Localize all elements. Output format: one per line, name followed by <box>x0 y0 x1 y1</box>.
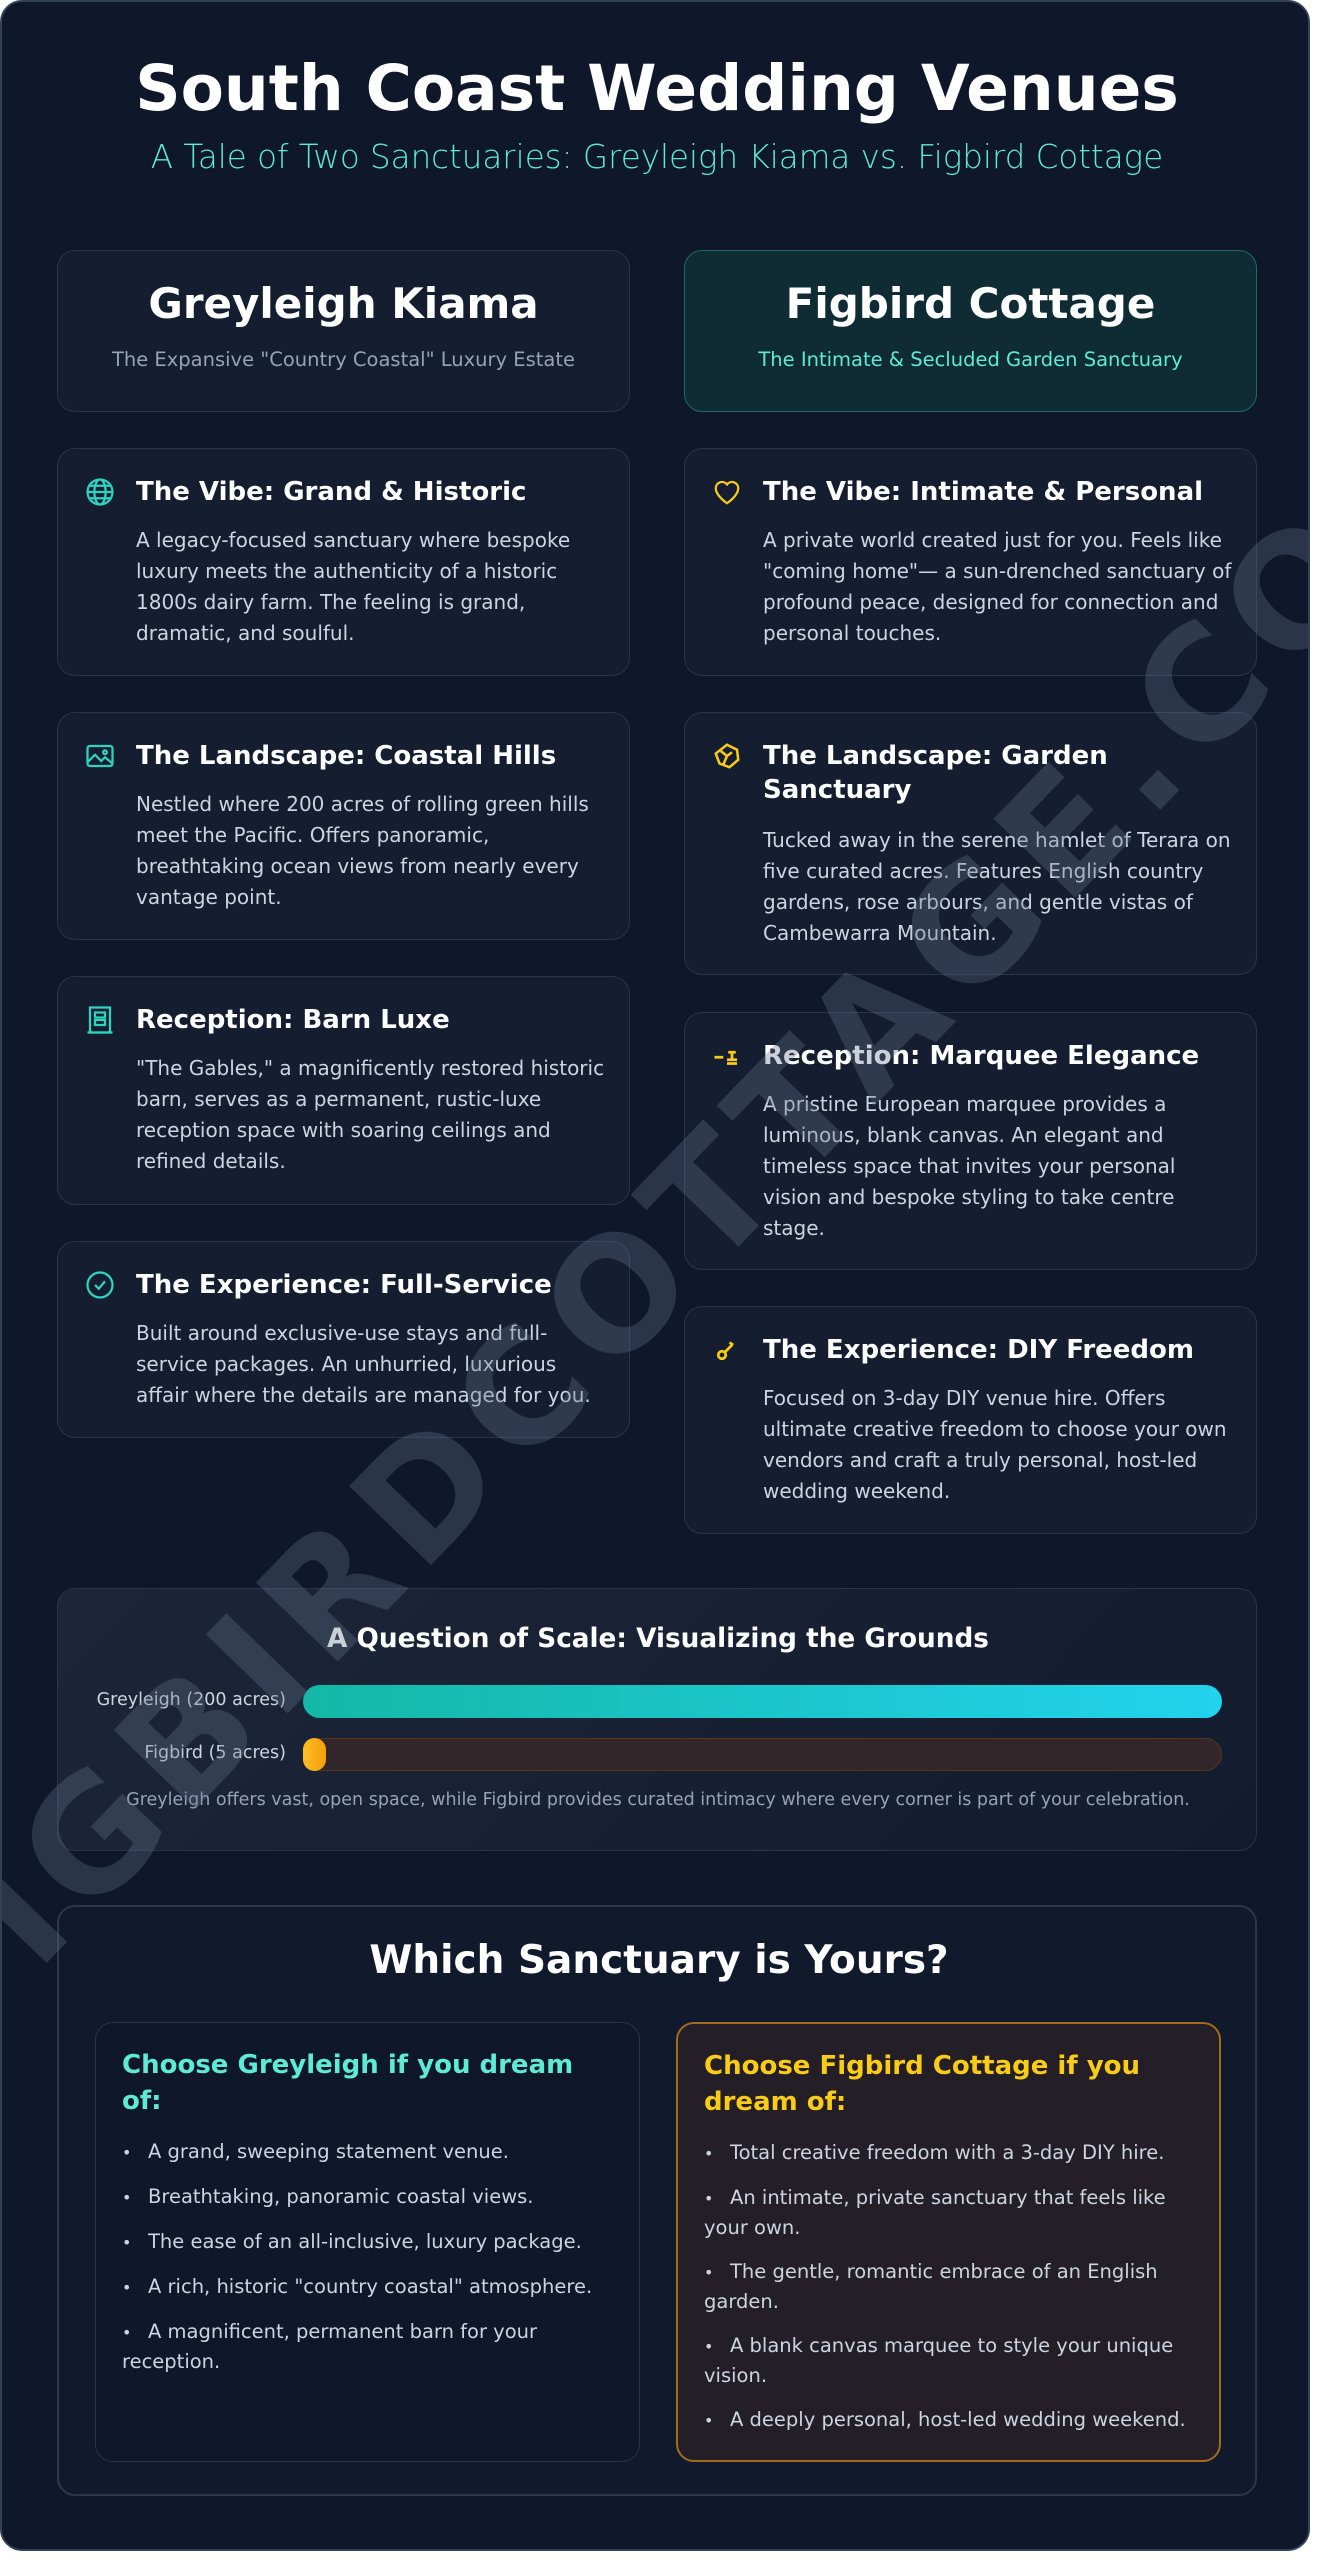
box: choose Figbird: Choose Figbird Cottage if you dream of: <box>704 2051 1140 2117</box>
icon: check circle <box>86 1271 114 1299</box>
title: South Coast Wedding Venues <box>135 52 1179 125</box>
box: choose Greyleigh: A magnificent, permanent barn for your reception. <box>122 2320 537 2373</box>
card: Greyleigh vibe: A legacy-focused sanctuary where bespoke luxury meets the authenticity of a historic 1800s dairy farm. The feeling is grand, dramatic, and soulful. <box>136 528 570 645</box>
card: Figbird reception: Reception: Marquee Elegance <box>763 1041 1199 1071</box>
card: Greyleigh landscape: Nestled where 200 acres of rolling green hills meet the Pacific. Offers panoramic, breathtaking ocean views from nearly every vantage point. <box>136 792 589 909</box>
icon: building <box>88 1006 112 1034</box>
card: Greyleigh reception: "The Gables," a magnificently restored historic barn, serves as a permanent, rustic-luxe reception space with soaring ceilings and refined details. <box>136 1056 604 1173</box>
card: Figbird experience <box>684 1306 1257 1534</box>
card: Figbird vibe: A private world created just for you. Feels like "coming home"— a sun-drenched sanctuary of profound peace, designed for connection and personal touches. <box>763 528 1231 645</box>
icon: wand <box>716 1341 734 1360</box>
card: Figbird vibe <box>684 448 1257 676</box>
card: Greyleigh reception: Reception: Barn Luxe <box>136 1005 450 1035</box>
panel: scale chart <box>57 1588 1257 1851</box>
card: Greyleigh vibe <box>57 448 630 676</box>
box: choose Greyleigh <box>95 2022 640 2462</box>
bar: Greyleigh <box>97 1685 1222 1718</box>
card: Greyleigh experience: The Experience: Full-Service <box>136 1270 552 1300</box>
box: choose Figbird: A deeply personal, host-led wedding weekend. <box>730 2408 1186 2431</box>
card: Figbird experience: Focused on 3-day DIY venue hire. Offers ultimate creative freedom to choose your own vendors and craft a truly personal, host-led wedding weekend. <box>763 1386 1227 1503</box>
card: Greyleigh experience <box>57 1241 630 1438</box>
header card: Greyleigh: The Expansive "Country Coastal" Luxury Estate <box>112 348 575 371</box>
card: Figbird vibe: The Vibe: Intimate & Personal <box>763 477 1203 507</box>
box: choose Figbird: A blank canvas marquee to style your unique vision. <box>704 2334 1173 2387</box>
box: choose Figbird: An intimate, private sanctuary that feels like your own. <box>704 2186 1166 2239</box>
box: choose Greyleigh: The ease of an all-inclusive, luxury package. <box>148 2230 582 2253</box>
card: Greyleigh reception <box>57 976 630 1205</box>
icon: flower <box>714 743 740 769</box>
box: choose Greyleigh: Choose Greyleigh if you dream of: <box>122 2050 573 2116</box>
panel: which sanctuary <box>57 1905 1257 2496</box>
card: Figbird landscape: The Landscape: Garden Sanctuary <box>763 741 1108 805</box>
box: choose Figbird: The gentle, romantic embrace of an English garden. <box>704 2260 1158 2313</box>
card: Figbird experience: The Experience: DIY Freedom <box>763 1335 1194 1365</box>
card: Figbird reception: A pristine European marquee provides a luminous, blank canvas. An elegant and timeless space that invites your personal vision and bespoke styling to take centre stage. <box>763 1092 1176 1240</box>
icon: image <box>86 744 114 768</box>
box: choose Greyleigh: Breathtaking, panoramic coastal views. <box>148 2185 534 2208</box>
box: choose Figbird: Total creative freedom with a 3-day DIY hire. <box>730 2141 1164 2164</box>
box: choose Figbird <box>676 2022 1221 2462</box>
card: Greyleigh landscape <box>57 712 630 940</box>
card: Greyleigh experience: Built around exclusive-use stays and full-service packages. An unhurried, luxurious affair where the details are managed for you. <box>136 1321 591 1407</box>
box: choose Greyleigh: A grand, sweeping statement venue. <box>148 2140 509 2163</box>
header card: Figbird: The Intimate & Secluded Garden Sanctuary <box>758 348 1183 371</box>
header card: Greyleigh <box>57 250 630 412</box>
subtitle: A Tale of Two Sanctuaries: Greyleigh Kiama vs. Figbird Cottage <box>151 138 1163 176</box>
heading: Which Sanctuary is Yours? <box>369 1938 949 1983</box>
icon: heart <box>714 480 740 505</box>
bar: Greyleigh: Greyleigh (200 acres) <box>97 1690 286 1710</box>
header card: Greyleigh: Greyleigh Kiama <box>148 279 539 328</box>
card: Greyleigh vibe: The Vibe: Grand & Historic <box>136 477 526 507</box>
card: Figbird landscape <box>684 712 1257 975</box>
icon: globe <box>86 478 114 506</box>
header card: Figbird: Figbird Cottage <box>786 279 1155 328</box>
header card: Figbird <box>684 250 1257 412</box>
card: Greyleigh landscape: The Landscape: Coastal Hills <box>136 741 556 771</box>
card: Figbird landscape: Tucked away in the serene hamlet of Terara on five curated acres. Features English country gardens, rose arbours, and gentle vistas of Cambewarra Mountain. <box>763 828 1231 945</box>
card: Figbird reception <box>684 1012 1257 1270</box>
bar: Figbird: Figbird (5 acres) <box>144 1743 286 1763</box>
icon: marquee <box>714 1050 737 1065</box>
box: choose Greyleigh: A rich, historic "country coastal" atmosphere. <box>148 2275 592 2298</box>
bar: Figbird <box>144 1738 1222 1771</box>
chart title: A Question of Scale: Visualizing the Grounds <box>327 1624 989 1654</box>
chart caption: Greyleigh offers vast, open space, while Figbird provides curated intimacy where every corner is part of your celebration. <box>126 1790 1190 1810</box>
